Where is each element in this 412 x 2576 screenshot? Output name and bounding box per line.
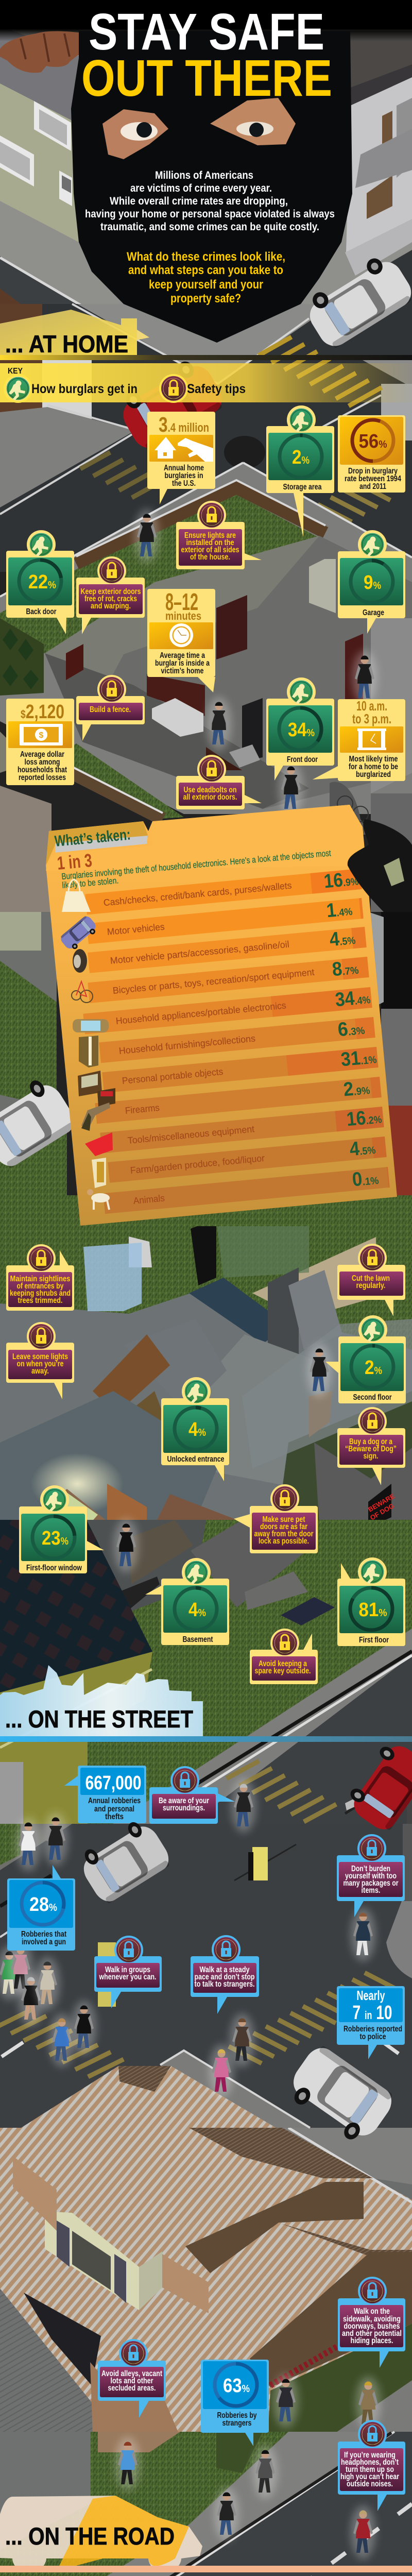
callout: back door 22%: Back door [26,607,57,616]
callout: robberies with a gun 28%: 28% [29,1894,57,1916]
callout: headphones: turn them up so [346,2465,394,2474]
callout: headphones: outside noises. [347,2480,393,2488]
callout: keep exterior doors free of rot: Keep exterior doors [80,587,141,596]
row: motor vehicles: 1.4% [325,898,353,922]
background: front garden and roof [0,1520,412,1829]
callout: avoid spare key: spare key outside. [254,1667,311,1675]
icon: boxes [78,1071,115,1107]
callout: walk at a steady pace: Walk at a steady [200,1965,250,1974]
callout: be aware of surroundings: Be aware of your [159,1797,209,1805]
callout: back door 22% [6,530,74,634]
icon: cabinet [79,1036,98,1067]
row: bicycles: 8.7% [331,957,359,980]
callout: cut the lawn: Cut the lawn [352,1274,390,1283]
intro text: traumatic, and some crimes can be quite costly. [100,221,319,233]
key legend [0,363,412,403]
row: cash [85,868,362,914]
callout: $2,120 average loss: households that [18,766,67,774]
callout: robberies with a gun 28%: Robberies that [21,1930,67,1939]
callout: buy a dog [337,1407,405,1485]
callout: 56% drop in burglary rate [338,415,405,493]
intro text: are victims of crime every year. [130,182,272,194]
group: robbers on sidewalk [16,1812,68,1871]
callout: 667,000 robberies: 667,000 [85,1772,141,1794]
callout: don't burden yourself: yourself with too [345,1872,397,1880]
callout: 63% robberies by strangers: strangers [222,2419,252,2428]
callout: 56% drop in burglary rate: 56% [358,431,387,452]
car: silver hatchback [74,1815,174,1906]
key legend: How burglars get in [31,382,138,396]
person: man hiding in bushes [273,2374,298,2428]
callout: walk at a steady pace: to talk to strangers. [195,1980,254,1989]
car: white sedan top right [300,249,412,352]
heading: what's taken: What’s taken: [54,826,131,850]
eye: left [102,109,168,159]
callout: don't burden yourself: items. [362,1886,380,1895]
callout: front door 34% [266,677,334,781]
callout: 8-12 minutes: burglar is inside a [155,659,210,668]
heading: on the street: ... ON THE STREET [5,1705,193,1733]
question text: and what steps can you take to [128,263,283,277]
callout: avoid spare key [250,1629,318,1684]
callout: pet doors [234,1484,318,1553]
callout: ensure lights installed: installed on the [186,538,234,547]
person: burglar at front door [279,761,303,815]
header: masked burglar [0,0,412,343]
callout: 63% robberies by strangers: Robberies by [217,2411,257,2420]
background: upper floor cutaway: OF DOG [369,1502,396,1522]
icon: fist [0,31,92,73]
car: red sedan under key [113,353,228,453]
callout: basement 4%: Basement [182,1635,213,1644]
question text: property safe? [170,292,241,306]
callout: garage 9%: Garage [363,608,384,617]
callout: 8-12 minutes [147,588,215,692]
callout: 3.4 million home burglaries: the U.S. [172,479,196,488]
person: burglar on fence [134,509,159,563]
callout: storage area 2% [266,405,334,537]
callout: ensure lights installed: Ensure lights are [184,531,236,540]
row: personal objects: Personal portable objects [122,1066,224,1086]
callout: 10 a.m. to 3 p.m.: 10 a.m. [356,698,387,714]
row: personal objects: 31.1% [340,1046,377,1071]
callout: walk on the sidewalk: doorways, bushes [344,2322,400,2331]
row: bicycles [88,956,369,1003]
callout: walk at a steady pace [191,1935,259,2014]
callout: leave some lights on [6,1322,74,1399]
callout: 63% robberies by strangers: 63% [223,2375,250,2397]
background: cutaway house ground floor [0,463,412,912]
callout: basement 4%: 4% [188,1599,206,1621]
callout: first-floor window 23% [19,1485,104,1573]
callout: $2,120 average loss: loss among [25,758,60,767]
person: burglar climbing second floor [307,1344,332,1397]
callout: headphones: high you can’t hear [340,2472,399,2481]
question text: What do these crimes look like, [127,250,285,264]
person: burglar at garage door [352,651,377,704]
callout: avoid alleys [98,2339,166,2418]
callout: avoid alleys: secluded areas. [108,2384,156,2393]
callout: front door 34%: Front door [287,755,318,764]
callout: avoid alleys: lots and other [110,2377,153,2385]
row: cash: 16.9% [323,868,359,892]
callout: nearly 7 in 10: Nearly [356,1988,385,2003]
callout: 10 a.m. to 3 p.m.: to 3 p.m. [352,711,391,726]
row: firearms [95,1076,382,1124]
callout: second floor 2% [325,1315,406,1403]
icon: revolver [81,1103,110,1131]
intro text: having your home or personal space violated is always [85,208,335,220]
callout: avoid alleys: Avoid alleys, vacant [101,2369,162,2378]
callout: $2,120 average loss: $ [39,731,44,740]
car: red car by traffic light [342,1736,412,1835]
callout: walk at a steady pace: pace and don’t stop [195,1973,254,1981]
callout: headphones [338,2420,405,2511]
heading: at home: ... AT HOME [5,330,128,358]
callout: second floor 2%: 2% [365,1357,382,1379]
row: tools: 16.2% [346,1106,383,1130]
callout: 56% drop in burglary rate: and 2011 [359,482,386,491]
callout: walk in groups [94,1936,162,2008]
callout: first floor 81%: 81% [358,1599,387,1621]
callout: garage 9% [338,530,405,634]
callout: walk on the sidewalk: Walk on the [354,2307,390,2316]
callout: don't burden yourself [337,1834,405,1917]
callout: unlocked entrance 4%: Unlocked entrance [167,1455,225,1464]
person: man on path [356,2377,381,2430]
row: vehicle parts: 4.5% [329,927,356,951]
icon: bicycle [72,981,93,1003]
callout: 63% robberies by strangers [201,2360,269,2446]
background: road section [0,2432,412,2576]
callout: 8-12 minutes: victim’s home [161,667,204,675]
callout: robberies with a gun 28%: involved a gun [22,1938,66,1946]
callout: basement 4% [145,1558,229,1645]
group: pedestrians on crossing [0,1941,96,2067]
row: furnishings: Household furnishings/collections [118,1033,256,1056]
callout: be aware of surroundings [149,1766,235,1824]
row: animals [103,1166,390,1214]
row: bicycles: Bicycles or parts, toys, recreation/sport equipment [112,967,315,996]
callout: walk on the sidewalk: sidewalk, avoiding [343,2315,401,2324]
heading: on the road: ... ON THE ROAD [5,2522,175,2550]
row: farm produce: Farm/garden produce, food/liquor [130,1153,265,1176]
person: pedestrian by crossing [231,1779,256,1833]
callout: nearly 7 in 10: 7 in 10 [352,2002,392,2024]
row: motor vehicles: Motor vehicles [107,922,165,937]
callout: maintain sightlines: keeping shrubs and [10,1289,71,1298]
callout: nearly 7 in 10: to police [359,2032,386,2041]
callout: pet doors: lock as possible. [259,1537,309,1546]
callout: 10 a.m. to 3 p.m. [313,698,405,781]
callout: leave some lights on: Leave some lights [12,1352,68,1361]
key legend: Safety tips [187,382,246,396]
callout: pet doors: doors are as far [260,1522,307,1531]
callout: walk on the sidewalk [338,2277,405,2368]
group: two people talking [209,2013,254,2098]
callout: garage 9%: 9% [364,572,381,594]
title [81,3,332,107]
callout: maintain sightlines [6,1244,74,1311]
callout: $2,120 average loss: Average dollar [20,750,64,759]
background: upper floor cutaway [0,1218,412,1582]
callout: ensure lights installed [176,501,262,569]
callout: pet doors: Make sure pet [263,1515,305,1524]
callout: storage area 2%: Storage area [283,483,322,492]
callout: ensure lights installed: exterior of all sides [181,546,239,554]
callout: be aware of surroundings: surroundings. [163,1804,205,1812]
callout: 8-12 minutes: Average time a [160,651,205,660]
row: personal objects [102,1046,379,1093]
callout: maintain sightlines: trees trimmed. [18,1296,63,1305]
stat: 1 in 3: 1 in 3 [56,850,93,874]
callout: headphones: If you’re wearing [344,2451,396,2460]
row: animals: Animals [133,1193,165,1206]
band: dark top [0,0,412,41]
callout: first floor 81%: First floor [359,1636,389,1645]
row: vehicle parts: Motor vehicle parts/accessories, gasoline/oil [110,939,289,966]
row: firearms: Firearms [125,1103,160,1116]
callout: 667,000 robberies: and personal [94,1805,134,1814]
car: police car [282,2042,398,2149]
callout: buy a dog: sign. [364,1452,378,1461]
background: at-home street [0,304,412,572]
callout: don't burden yourself: many packages or [343,1879,399,1888]
title: STAY SAFE [89,3,324,61]
callout: leave some lights on: away. [31,1367,49,1376]
row: firearms: 2.9% [342,1077,371,1100]
car: white jeep [0,1072,80,1172]
callout: 667,000 robberies: thefts [105,1812,124,1821]
panel: what's taken folder [46,805,397,1226]
callout: don't burden yourself: Don’t burden [351,1865,390,1873]
callout: 667,000 robberies [64,1766,146,1823]
icon: dog [87,1189,110,1210]
callout: first-floor window 23%: 23% [42,1528,68,1549]
callout: robberies with a gun 28% [7,1865,75,1951]
section banner: on the road [0,2496,412,2572]
icon: handheld console [73,1019,109,1032]
callout: 56% drop in burglary rate: Drop in burglary [348,467,398,476]
callout: walk on the sidewalk: hiding places. [350,2336,393,2345]
callout: $2,120 average loss [6,699,74,785]
row: farm produce: 4.5% [349,1137,376,1160]
icon: handbag [62,880,91,912]
callout: 10 a.m. to 3 p.m.: for a home to be [349,762,398,771]
intro text [85,170,335,233]
callout: pet doors: away from the door [254,1530,313,1538]
row: appliances: 34.4% [334,986,371,1011]
callout: storage area 2%: 2% [292,447,310,468]
row: appliances: Household appliances/portable electronics [115,1000,286,1026]
callout: use deadbolts: Use deadbolts on [183,786,237,794]
callout: front door 34%: 34% [288,719,315,741]
background: large house roof [0,2128,412,2437]
row: animals: 0.1% [351,1167,380,1191]
background: intersection [0,1824,412,2128]
callout: back door 22%: 22% [28,571,56,593]
callout: 3.4 million home burglaries [147,412,215,504]
section banner: on the street [0,1665,412,1742]
intro text: Millions of Americans [155,170,253,181]
person: burglar at window [114,1519,139,1572]
callout: walk in groups: Walk in groups [105,1965,150,1974]
key legend: KEY [8,367,23,376]
callout: 3.4 million home burglaries: 3.4 million [159,413,209,436]
callout: maintain sightlines: of entrances by [16,1282,64,1291]
callout: 8-12 minutes: 8–12 [165,588,198,615]
background: top neighbourhood [0,0,412,309]
callout: avoid spare key: Avoid keeping a [259,1659,307,1668]
title: OUT THERE [81,49,332,107]
callout: keep exterior doors free of rot: free of rot, cracks [84,595,137,603]
callout: ensure lights installed: of the house. [190,553,230,562]
callout: buy a dog: Buy a dog or a [349,1437,392,1446]
callout: walk in groups: whenever you can. [99,1973,157,1981]
callout: 3.4 million home burglaries: Annual home [164,464,204,472]
callout: walk on the sidewalk: and other potential [342,2329,402,2338]
callout: leave some lights on: on when you’re [16,1360,64,1368]
background: upper floor cutaway: BEWARE [367,1492,396,1514]
icon: gloved hand [348,819,412,912]
group: people on lawn [115,2437,375,2559]
row: cash: Cash/checks, credit/bank cards, purses/wallets [103,880,292,908]
row: furnishings: 6.3% [337,1017,366,1041]
text: burglaries involving electronics: Burglaries involving the theft of household electronics. Here’s a look at the objects most [61,848,332,882]
callout: $2,120 average loss: reported losses [19,773,66,782]
callout: maintain sightlines: Maintain sightlines [10,1275,70,1283]
row: furnishings [99,1016,375,1063]
section banner: at home [0,310,412,360]
callout: cut the lawn [337,1244,405,1316]
callout: unlocked entrance 4% [161,1377,229,1481]
callout: headphones: headphones, don’t [341,2458,399,2467]
row: farm produce [108,1136,387,1183]
person: woman with bags [351,1908,375,1961]
question text: keep yourself and your [149,278,263,292]
callout: use deadbolts [176,755,262,809]
callout: 3.4 million home burglaries: burglaries in [165,471,203,480]
background: behind folder [0,912,412,1226]
eye: right [210,98,296,145]
callout: buy a dog: “Beware of Dog” [345,1445,397,1453]
callout: $2,120 average loss: $2,120 [21,701,64,723]
callout: first floor 81% [337,1557,405,1646]
icon: toolbox [85,1132,113,1156]
icon: toy car [59,914,99,953]
callout: cut the lawn: regularly. [356,1281,385,1290]
callout: keep exterior doors free of rot: and warping. [91,602,131,611]
callout: second floor 2%: Second floor [353,1393,391,1402]
icon: tyre [73,949,87,973]
callout: unlocked entrance 4%: 4% [188,1419,206,1440]
callout: build a fence: Build a fence. [90,705,131,714]
text: burglaries involving electronics [61,848,332,890]
mask [71,31,352,343]
row: tools [100,1106,384,1154]
callout: 667,000 robberies: Annual robberies [88,1797,141,1805]
callout: first-floor window 23%: First-floor window [26,1564,82,1572]
icon: shelf of food [92,1158,106,1188]
intro text: While overall crime rates are dropping, [110,195,288,207]
row: tools: Tools/miscellaneous equipment [127,1124,255,1146]
person: burglar in kitchen [207,697,231,751]
callout: keep exterior doors free of rot [76,556,145,634]
text: burglaries involving electronics: likely to be stolen. [62,875,119,890]
callout: use deadbolts: all exterior doors. [183,793,237,802]
row: motor vehicles [87,897,364,944]
row: appliances [83,986,372,1035]
callout: nearly 7 in 10 [337,1986,405,2059]
callout: 10 a.m. to 3 p.m.: Most likely time [349,755,398,764]
row: vehicle parts [88,926,367,973]
question text [127,250,285,306]
callout: build a fence [76,675,145,741]
callout: 10 a.m. to 3 p.m.: burglarized [356,770,391,779]
callout: 8-12 minutes: minutes [165,609,201,622]
